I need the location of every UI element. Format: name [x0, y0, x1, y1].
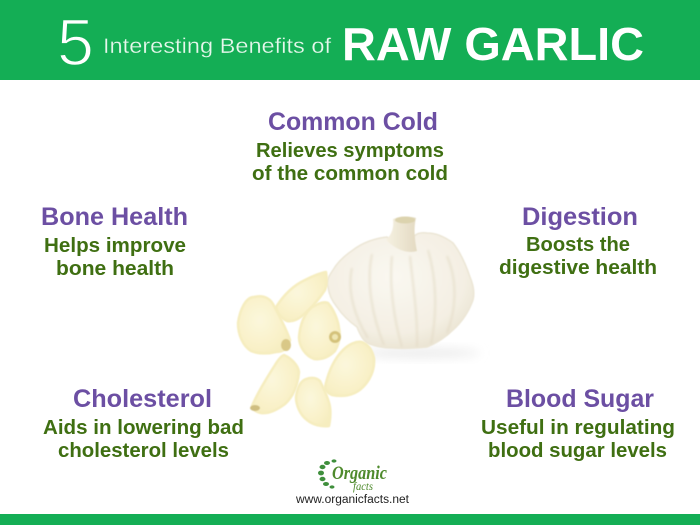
- benefit: digestion: digestive health: [499, 257, 657, 279]
- title numeral 5: 5: [57, 5, 94, 79]
- header banner: [0, 0, 700, 80]
- benefit: common cold: of the common cold: [252, 163, 448, 185]
- benefit: cholesterol: Aids in lowering bad: [43, 417, 244, 439]
- benefit: cholesterol: Cholesterol: [73, 385, 212, 413]
- benefit: cholesterol: cholesterol levels: [58, 440, 229, 462]
- title emphasis: RAW GARLIC: [342, 18, 644, 70]
- icon: garlic clove left: [238, 296, 291, 353]
- icon: leaf wreath: [318, 459, 336, 489]
- bulb ribs: [350, 250, 455, 347]
- logo wordmark: Organic: [332, 463, 387, 484]
- garlic illustration: [238, 216, 480, 426]
- benefit: blood sugar: Blood Sugar: [506, 385, 654, 413]
- benefit: bone health: Helps improve: [44, 235, 186, 257]
- icon: garlic clove top: [276, 272, 327, 321]
- logo: organic facts: [295, 459, 410, 506]
- benefit: cholesterol: [43, 385, 244, 462]
- benefit: bone health: bone health: [56, 258, 174, 280]
- website url: www.organicfacts.net: [295, 494, 410, 506]
- logo sub wordmark: facts: [353, 479, 373, 493]
- icon: garlic bulb: [327, 216, 474, 348]
- icon: garlic clove right: [325, 342, 374, 396]
- benefit: blood sugar: Useful in regulating: [481, 417, 675, 439]
- benefit: bone health: [41, 203, 188, 280]
- bulb stem: [386, 217, 417, 252]
- benefit: digestion: Boosts the: [526, 234, 630, 256]
- benefit: digestion: Digestion: [522, 203, 638, 231]
- benefit: common cold: Relieves symptoms: [256, 140, 444, 162]
- benefit: common cold: [252, 108, 448, 185]
- benefit: bone health: Bone Health: [41, 203, 188, 231]
- icon: garlic clove lower left: [250, 355, 299, 413]
- benefit: common cold: Common Cold: [268, 108, 438, 136]
- icon: garlic clove bottom: [296, 378, 330, 426]
- benefit: blood sugar: blood sugar levels: [488, 440, 667, 462]
- title text: Interesting Benefits of: [103, 35, 331, 58]
- benefit: blood sugar: [481, 385, 675, 462]
- benefit: digestion: [499, 203, 657, 279]
- footer bar: [0, 514, 700, 525]
- icon: garlic clove center: [299, 302, 341, 359]
